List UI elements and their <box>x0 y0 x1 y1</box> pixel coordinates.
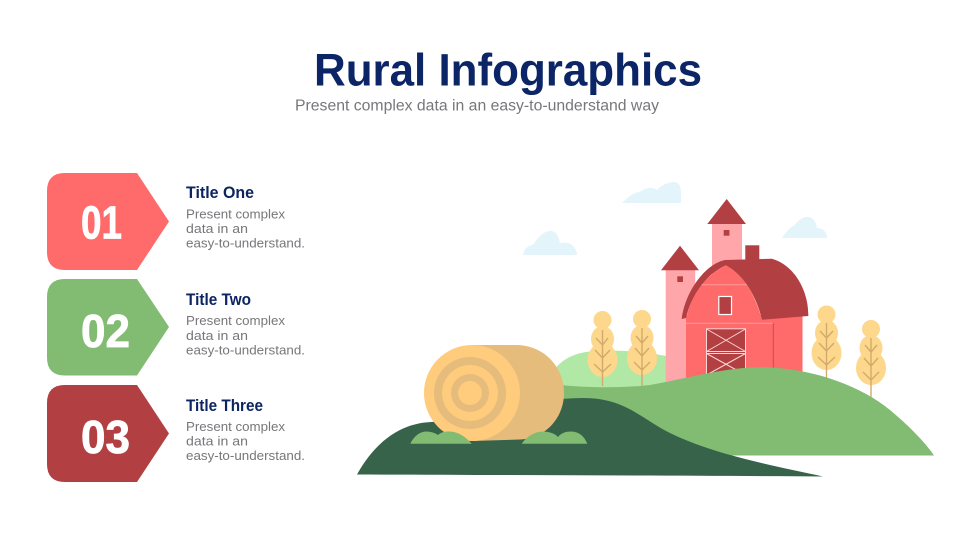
number 03: 03 <box>81 411 130 463</box>
badge 01 <box>47 173 169 270</box>
dark green foreground hill <box>357 398 823 476</box>
silo <box>661 246 699 385</box>
item 03 <box>47 385 305 482</box>
heading: Title Three: Title Three <box>186 397 263 415</box>
number 01: 01 <box>81 196 122 248</box>
chimney <box>745 245 759 261</box>
right bush <box>522 432 587 444</box>
tree 3 <box>812 306 842 378</box>
description three: Present complex <box>186 419 286 434</box>
tree 4 <box>856 320 886 397</box>
tree 2 <box>627 310 657 386</box>
farm illustration <box>357 182 934 476</box>
description three: easy-to-understand. <box>186 448 305 463</box>
subtitle: Present complex data in an easy-to-understand way <box>295 98 659 114</box>
heading: Title One: Title One <box>186 184 254 202</box>
description two: Present complex <box>186 313 286 328</box>
title: Rural Infographics <box>314 44 702 96</box>
heading: Title Two: Title Two <box>186 291 251 309</box>
description one: easy-to-understand. <box>186 236 305 251</box>
description two: data in an <box>186 328 248 343</box>
description three: data in an <box>186 434 248 448</box>
description one: data in an <box>186 221 248 236</box>
left bush <box>410 432 472 444</box>
clouds <box>523 182 827 255</box>
badge 03 <box>47 385 169 482</box>
hay bale <box>424 345 564 441</box>
item 02 <box>47 279 305 376</box>
description one: Present complex <box>186 206 286 221</box>
back light green hill <box>545 351 675 392</box>
barn <box>682 259 808 380</box>
item 01 <box>47 173 305 270</box>
badge 02 <box>47 279 169 376</box>
tree 1 <box>588 311 618 386</box>
description two: easy-to-understand. <box>186 342 305 358</box>
tall tower <box>707 199 746 274</box>
number 02: 02 <box>81 305 130 357</box>
front green hill <box>560 367 934 456</box>
